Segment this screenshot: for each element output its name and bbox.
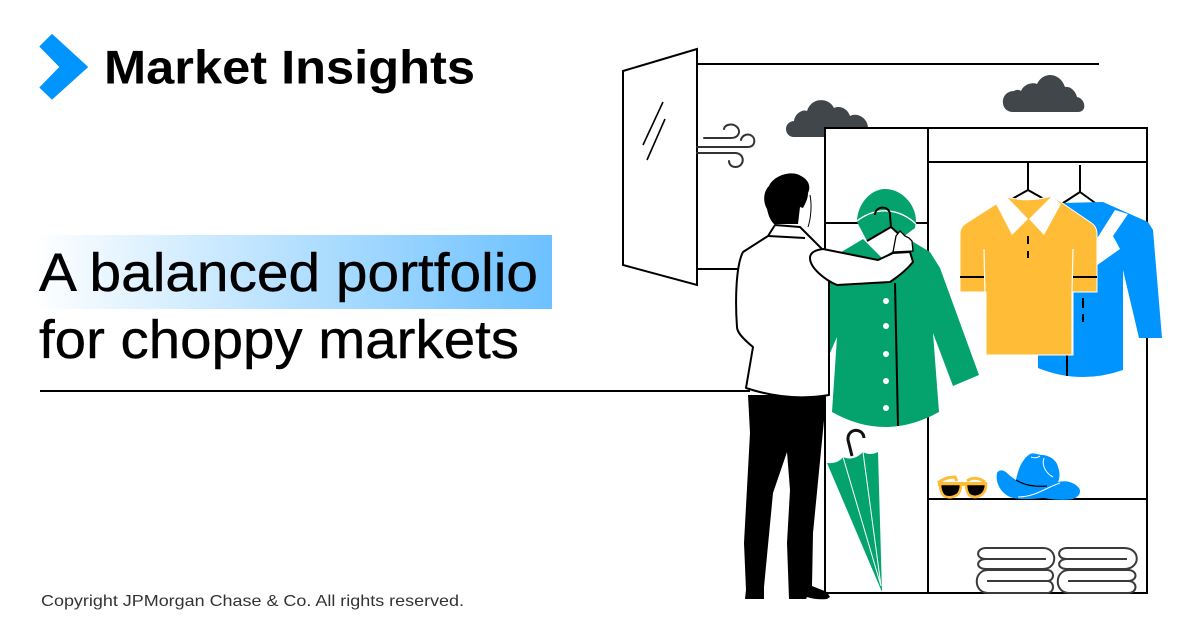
icon: umbrella [827, 430, 882, 592]
icon: left cloud [786, 100, 868, 137]
icon: sunglasses [938, 477, 987, 497]
headline highlight [33, 235, 552, 309]
hand [893, 231, 913, 252]
neck line [808, 195, 811, 227]
icon: folded towels [977, 548, 1137, 593]
jacket [736, 225, 829, 397]
green coat [830, 189, 979, 427]
copyright: Copyright JPMorgan Chase & Co. All rights reserved. [41, 593, 464, 610]
arm [810, 249, 913, 285]
icon: right cloud [1003, 75, 1084, 112]
wall lines [697, 64, 1099, 269]
wardrobe [825, 128, 1147, 593]
divider rule [40, 390, 750, 392]
window mirror [623, 49, 697, 285]
icon: blue hat [997, 453, 1080, 500]
blue jacket [1038, 165, 1162, 377]
hair [764, 173, 809, 224]
icon: blue chevron logo [40, 34, 88, 99]
icon: wind [697, 125, 754, 167]
yellow shirt [960, 162, 1097, 355]
trousers [744, 395, 830, 599]
man [736, 173, 913, 599]
headline: for choppy markets [39, 310, 519, 370]
brand title: Market Insights [104, 42, 475, 94]
headline: A balanced portfolio [39, 243, 538, 303]
headline [39, 243, 538, 370]
